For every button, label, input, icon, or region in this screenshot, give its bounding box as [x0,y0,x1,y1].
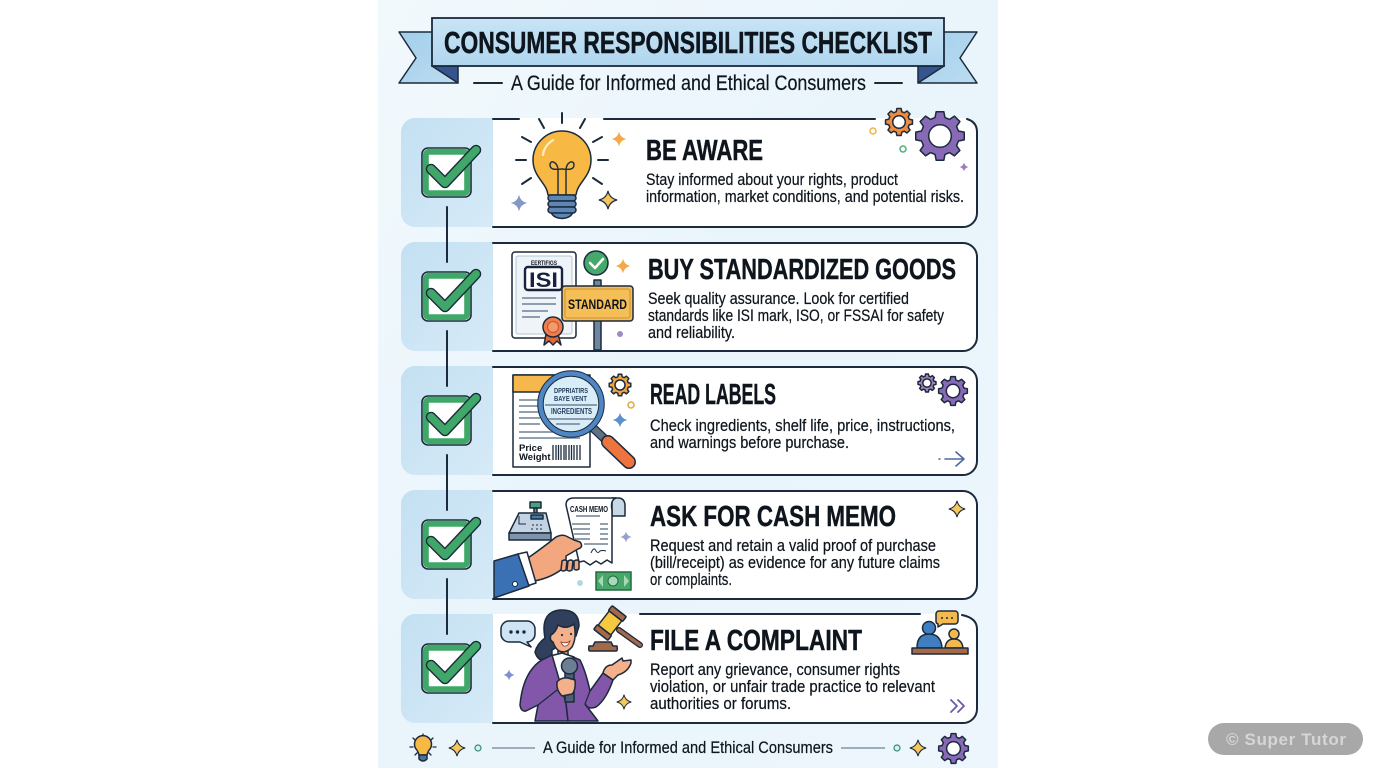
icon: product label and magnifier: BAYE VENT [554,394,587,403]
heading: FILE A COMPLAINT [650,625,862,657]
description: information, market conditions, and potential risks. [646,188,964,206]
check tab [401,118,493,227]
icon: light bulb [516,113,608,218]
icons: sparkles [577,501,965,586]
title banner [399,18,977,83]
description: Stay informed about your rights, product [646,171,898,189]
banner body [432,18,944,66]
icon: standard sign [562,251,633,350]
icon: product label and magnifier: Price [519,443,542,454]
description: and reliability. [648,324,735,342]
title: CONSUMER RESPONSIBILITIES CHECKLIST [444,25,932,60]
panel: be aware [401,109,977,227]
icon: woman with microphone [520,610,631,721]
heading: BE AWARE [646,135,763,167]
icon: gears [918,374,967,405]
icon: gavel [589,606,640,651]
description: or complaints. [650,571,732,589]
description: Seek quality assurance. Look for certified [648,290,909,308]
icon: cash memo receipt [566,498,625,565]
description: violation, or unfair trade practice to relevant [650,678,935,696]
icon: product label and magnifier: Weight [519,452,551,463]
icons: footer ornaments left [449,740,535,756]
icons: footer ornaments right [841,734,968,763]
description: authorities or forums. [650,695,791,713]
icon: cash memo receipt: CASH MEMO [570,505,608,514]
description: Check ingredients, shelf life, price, instructions, [650,417,955,435]
icons: small accents [609,374,634,427]
icon: gears [870,109,964,160]
panel: read labels [401,366,977,475]
icon: consultation people [912,611,968,654]
icon: certificate: EERTIFIGS [531,260,558,267]
icon: product label and magnifier [513,374,629,467]
watermark [1208,723,1363,755]
panel: ask for cash memo [401,490,977,599]
icon: banknote [596,572,631,590]
background panel [378,0,998,768]
timeline connectors [446,207,448,634]
description: Request and retain a valid proof of purchase [650,537,936,555]
check tab [401,242,493,351]
heading: BUY STANDARDIZED GOODS [648,254,956,286]
icon: product label and magnifier: DPPRIATIRS [554,386,588,395]
icon: hand holding receipt [494,535,582,598]
description: (bill/receipt) as evidence for any future claims [650,554,940,572]
watermark: © Super Tutor [1226,730,1346,749]
footer text: A Guide for Informed and Ethical Consumers [543,739,833,757]
check tab [401,490,493,599]
icon: chevrons [951,700,964,712]
icons: sparkles [511,132,969,211]
footer [410,734,968,763]
icon: cash register [509,502,551,540]
panel: file a complaint [401,606,977,723]
icon: arrow [939,452,964,466]
description: and warnings before purchase. [650,434,849,452]
description: standards like ISI mark, ISO, or FSSAI for safety [648,307,945,325]
check tab [401,614,493,723]
icon: sparkles [504,670,631,709]
icon: certificate [512,252,576,345]
heading: READ LABELS [650,379,776,411]
panel: buy standardized goods [401,242,977,351]
icon: speech bubble [501,621,535,647]
ribbon tails [399,32,977,83]
icon: certificate: ISI [529,269,558,292]
gavel head [594,606,626,640]
icon: footer bulb [410,734,436,761]
lamp base [548,195,576,218]
icon: standard sign: STANDARD [568,296,627,312]
subtitle: A Guide for Informed and Ethical Consumers [511,72,866,95]
description: Report any grievance, consumer rights [650,661,900,679]
check tab [401,366,493,475]
icon: product label and magnifier: INGREDIENTS [551,407,592,416]
heading: ASK FOR CASH MEMO [650,501,896,533]
